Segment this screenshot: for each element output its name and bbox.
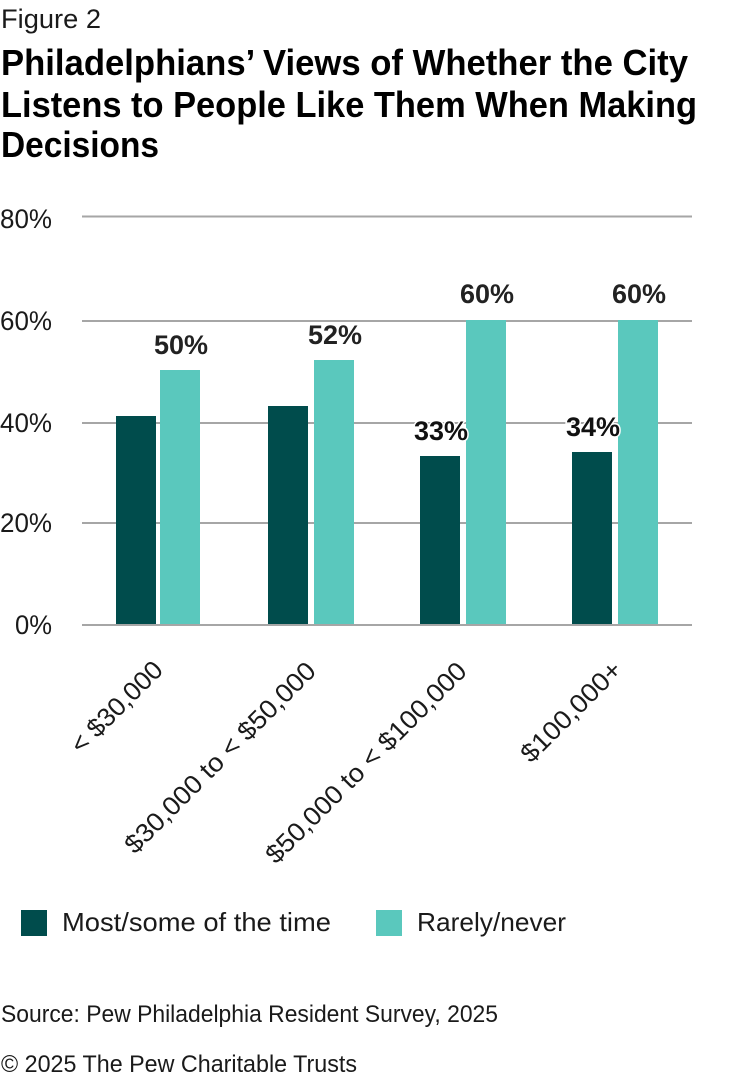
title: Listens to People Like Them When Making	[1, 84, 697, 125]
data labels: 34%	[566, 412, 620, 442]
y axis labels: 80%	[0, 204, 52, 234]
bars: most/some of the time	[116, 406, 612, 624]
figure label: Figure 2	[1, 4, 101, 34]
y axis labels: 20%	[0, 508, 52, 538]
x axis labels	[64, 654, 628, 869]
data labels: 60%	[612, 279, 666, 309]
source note: Source: Pew Philadelphia Resident Survey, 2025	[1, 1001, 498, 1028]
y axis labels: 40%	[0, 408, 52, 438]
title: Decisions	[1, 124, 159, 165]
data labels: 60%	[460, 279, 514, 309]
bars: rarely/never	[160, 320, 658, 624]
data labels: 50%	[154, 330, 208, 360]
x axis labels: $30,000 to < $50,000	[118, 656, 322, 859]
y axis labels	[0, 204, 52, 640]
copyright: © 2025 The Pew Charitable Trusts	[1, 1051, 357, 1078]
x axis labels: < $30,000	[64, 655, 169, 759]
data labels	[154, 279, 666, 446]
legend: Rarely/never	[417, 907, 566, 937]
x axis labels: $100,000+	[514, 654, 628, 768]
bar chart	[0, 204, 692, 869]
y axis labels: 60%	[0, 306, 52, 336]
data labels: 33%	[414, 416, 468, 446]
y axis labels: 0%	[15, 610, 52, 640]
title	[1, 42, 697, 165]
data labels: 52%	[308, 320, 362, 350]
legend	[21, 907, 566, 937]
x axis labels: $50,000 to < $100,000	[259, 656, 473, 869]
title: Philadelphians’ Views of Whether the City	[1, 42, 688, 83]
legend: Most/some of the time	[62, 907, 331, 937]
